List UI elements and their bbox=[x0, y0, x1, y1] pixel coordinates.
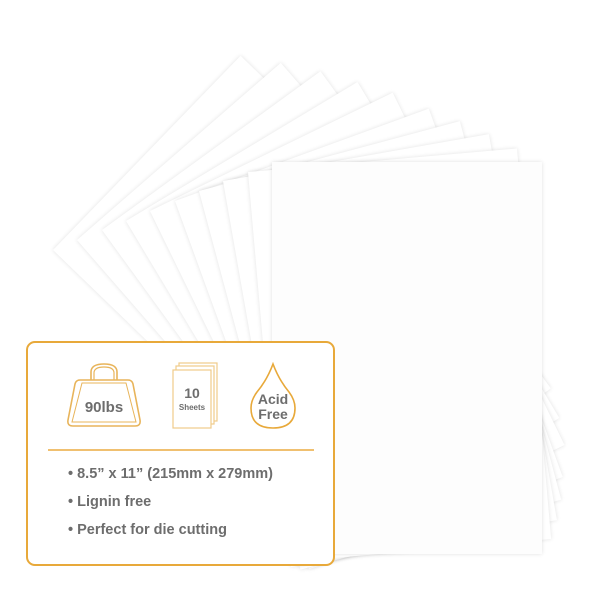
icon: acid free drop bbox=[250, 362, 296, 429]
text: die cutting bullet: • Perfect for die cutting bbox=[68, 522, 227, 538]
icon: weight 90lbs bbox=[67, 363, 141, 427]
icon: 10 sheets: Sheets bbox=[179, 403, 206, 412]
icon: weight 90lbs: 90lbs bbox=[85, 399, 123, 416]
text: lignin bullet: • Lignin free bbox=[68, 494, 151, 510]
icon: acid free drop: Free bbox=[258, 406, 288, 422]
icon: 10 sheets: 10 bbox=[184, 385, 200, 401]
panel: features bbox=[26, 341, 335, 566]
icon: 10 sheets bbox=[172, 362, 218, 429]
icon: acid free drop: Acid bbox=[258, 391, 288, 407]
text: size bullet: • 8.5” x 11” (215mm x 279mm) bbox=[68, 466, 273, 482]
